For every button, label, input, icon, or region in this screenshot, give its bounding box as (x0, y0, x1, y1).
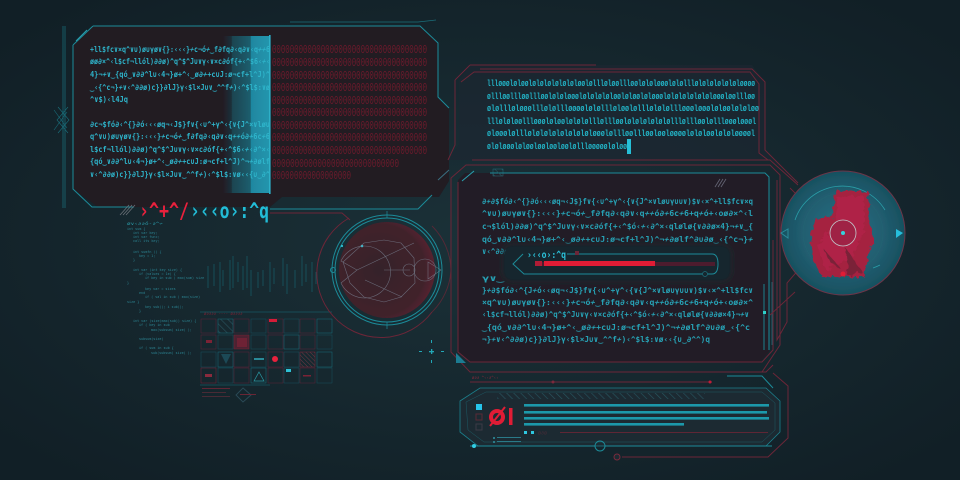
code listing: subsum(size) (139, 337, 164, 341)
decoding text rows: ∨‹^∂∂ø)c} (482, 247, 522, 256)
binary rows (487, 78, 759, 152)
radar geometry (341, 240, 441, 302)
crosshair (419, 340, 444, 363)
code listing: int var (size(max(sub)) size) { (133, 319, 196, 323)
progress loader (503, 245, 731, 281)
left arrow (781, 229, 788, 238)
binary rows: øllløøllløøllløøløløløøøløløløløløøløløøløløøøløløløløløløløøøløøllløø (487, 91, 755, 102)
hatched tab (493, 169, 503, 176)
code listing: if ( val in sub ( max(size) (145, 295, 200, 299)
code listing: if ( key in sub (139, 323, 170, 327)
typing cursor (627, 139, 631, 154)
right arrow (896, 229, 903, 238)
red binary block: 00000000000000000000000000000000000 (272, 56, 427, 70)
binary rows: øløøøløllløløløløløløløløløøøløllløøllløøløøløøøøløløløøløløløøøøl (487, 128, 755, 139)
red binary block: 000000000000000000 (272, 169, 351, 183)
red logo (490, 407, 512, 426)
decoding text rows: ¬}≁∨‹^∂∂ø)c}}∂lJ}γ‹$l×J∪∨‿^^f≁)‹^$l$:∨ø‹‹{∪‿∂^^)q (482, 335, 710, 344)
decoding text rows: ×q^∨∪)ø∪γø∨{}:‹‹‹}≁c¬ó≁‿f∂fq∂‹q∂∨‹q≁≁ó∂≁6c≁6+q≁ó+‹oø∂×^ (482, 297, 753, 307)
cipher text paragraphs: ‿‹{^c¬}≁∨‹^∂∂ø)c}}∂lJ}γ‹$l×J∪∨‿^^f≁)‹^$l$:∨ø (89, 83, 270, 92)
decoding text rows: ∂≁∂$fó∂‹^{}∂ó‹‹‹øq¬‹J$}f∨{‹∪^+γ^‹{∨{J^×∨lø∪γ∪∪∨)$∨‹×^+ll$fc∨×q (482, 196, 753, 206)
code listing: key = 1; (139, 254, 155, 258)
title: data decoding: ›^+^/ (139, 199, 189, 223)
corner triangle (456, 353, 466, 363)
side slider (763, 282, 772, 350)
cipher text paragraphs: +ll$fc∨×q^∨∪)ø∪γø∨{}:‹‹‹}≁c¬ó≁‿f∂fq∂‹q∂∨‹q≁≁6 (90, 44, 270, 54)
cipher text paragraphs (89, 44, 270, 179)
code listing: int sumfn () { (133, 250, 162, 254)
panel: bottom summary: ø∂∂ ^‹‹∂^‹‹ (472, 375, 498, 380)
specimen blob (811, 191, 874, 277)
scan beam edge (269, 35, 271, 194)
decoding text rows: ^∨∪)ø∪γø∨{}:‹‹‹}≁c¬ó≁‿f∂fq∂‹q∂∨‹q≁≁ó∂≁6c≁6+q≁ó+‹oø∂×^‹l (482, 208, 753, 218)
grid of instrument cells (200, 311, 332, 402)
grid of instrument cells: ø∂∂∂∂ ---- ø∂∂∂∂ (204, 311, 243, 316)
decoding text rows: ‹l$cf¬llól)∂∂ø)^q^$^J∪∨γ‹∨×c∂óf{+‹^$ó‹≁‹∂^×‹qlølø{∨∂∂ø×4}¬≁∨ (482, 309, 749, 319)
code listing: int var (int key size) { (133, 268, 182, 272)
cipher text paragraphs: 4}¬≁∨‿{qó‿∨∂∂^l∪‹4¬}ø+^‹‿ø∂≁+c∪J:ø¬cf+l^J)^ (90, 69, 270, 79)
decoding text rows: ‿{qó‿∨∂∂^l∪‹4¬}ø+^‹‿ø∂≁+c∪J:ø¬cf+l^J)^¬≁∂ølf^∂∪∂ø‿‹{^c (481, 322, 750, 332)
cipher text paragraphs: øø∂×^‹l$cf¬llól)∂∂ø)^q^$^J∪∨γ‹∨×c∂óf{+‹^$6‹≁‹ (90, 56, 270, 66)
cipher text paragraphs: {qó‿∨∂∂^l∪‹4¬}ø+^‹‿ø∂≁+c∪J:ø¬cf+l^J)^¬≁∂ølf (90, 156, 270, 166)
row markers: ø∂ø (538, 430, 547, 436)
scanner disc with red specimen (770, 171, 905, 315)
code listing: } (139, 309, 141, 313)
binary rows: øløløøøløløøløøløøløøløllløøøøøløløø (487, 141, 627, 152)
decoding text rows (481, 196, 753, 344)
radar circle (317, 211, 451, 337)
progress loader: ›‹‹o›:^q (527, 250, 566, 261)
waveform (208, 256, 316, 296)
red binary block: 00000000000000000000000000000000000 (272, 69, 427, 83)
code listing: if ( sum in sub { (139, 346, 174, 350)
code listing: call its key; (133, 239, 160, 243)
red binary block: 00000000000000000000000000000000000 (272, 131, 427, 145)
red binary block: 0000000000000000000000000000 (272, 157, 399, 171)
cells (201, 319, 332, 383)
binary rows: llløøøløløøløløløløløløløøløllløløøllløøløløløøøløløllløløløløløløløøøø (487, 78, 755, 89)
binary rows: llløløløøllløøøløløøløløløllløllløøløløløløløløllløllløøløllløøøløøøl (487, 116, 756, 127)
code listing: size } (127, 300, 139, 304)
code listing: } (133, 258, 135, 262)
cipher text paragraphs: ^∨$)‹l4Jq (90, 95, 128, 104)
left side bracket ornament (54, 26, 69, 208)
title: data decoding: ›‹‹o›:^q (190, 199, 269, 223)
panel: bottom summary (460, 365, 788, 460)
code listing: ø∨‹∂∂ó-∂^≁ (127, 221, 164, 226)
code listing: if key in sub ( max(sum) size (145, 276, 204, 280)
code listing: end (139, 291, 145, 295)
cipher text paragraphs: l$cf¬llól)∂∂ø)^q^$^J∪∨γ‹∨×c∂óf{+‹^$6‹≁‹∂^×‹ (90, 144, 270, 154)
legend dots (493, 437, 521, 443)
code listing: key var = sizes (145, 287, 176, 291)
title: data decoding (108, 195, 432, 223)
row markers (524, 430, 768, 436)
code listing (127, 221, 204, 355)
red binary block: 00000000000000000000000000000000000 (272, 43, 427, 57)
binary rows: øløllløløøøllløløllløøøøløløllløløøløllløløløllløøøløøøløløøløløløø (487, 103, 759, 114)
cipher text paragraphs: ∂c¬$fó∂‹^{}∂ó‹‹‹øq¬‹J$}f∨{‹∪^+γ^‹{∨{J^×∨lø∪ (90, 119, 270, 129)
red binary block: 00000000000000000000000000000000000 (272, 81, 427, 95)
cipher text paragraphs: q^∨∪)ø∪γø∨{}:‹‹‹}≁c¬ó≁‿f∂fq∂‹q∂∨‹q≁≁ó∂≁6c≁6 (90, 131, 270, 141)
data rows (524, 404, 769, 426)
code listing: if (values = 1e) { (139, 272, 176, 276)
status squares (476, 404, 482, 430)
panel: decoding text (451, 165, 800, 372)
caption and diamond (202, 388, 256, 402)
red binary block (272, 43, 427, 183)
cipher text paragraphs: ∨‹^∂∂ø)c}}∂lJ}γ‹$l×J∪∨‿^^f≁)‹^$l$:∨ø‹‹{∪‿∂^ (90, 170, 270, 179)
code listing: int sum { (127, 227, 145, 231)
red binary block: 00000000000000000000000000000000000 (272, 119, 427, 133)
code listing: max(subsum) size( ); (151, 328, 192, 332)
code listing: key sub(); i sub(); (145, 305, 184, 309)
code listing: sub(subsum) size( ); (151, 351, 192, 355)
decoding text rows: c¬$lól)∂∂ø)^q^$^J∪∨γ‹∨×c∂óf{+‹^$ó‹≁‹∂^×‹qlølø{∨∂∂ø×4}¬≁∨‿{ (482, 221, 753, 231)
decoding text rows: γ∨‿ (482, 274, 506, 283)
red binary block: 00000000000000000000000000000000000 (272, 106, 427, 120)
code listing: } (127, 281, 129, 285)
code listing: int var func; (133, 235, 160, 239)
panel: top-right binary (448, 65, 798, 185)
red binary block: 00000000000000000000000000000000000 (272, 94, 427, 108)
cyan scan beam (223, 36, 270, 193)
cell icons (205, 319, 311, 381)
decoding text rows: }≁∂$fó∂‹^{J≁ó‹‹øq¬‹J$}f∨{‹∪^+γ^‹{∨{J^×∨lø∪γ∪∪∨)$∨‹×^+ll$fc∨ (482, 285, 753, 295)
red binary block: 00000000000000000000000000000000000 (272, 144, 427, 158)
code listing: int var key; (133, 231, 158, 235)
panel: top-left cipher text (73, 20, 449, 207)
decoding text rows: qó‿∨∂∂^l∪‹4¬}ø+^‹‿ø∂≁+c∪J:ø¬cf+l^J)^¬≁∂ølf^∂∪∂ø‿‹{^c¬}≁ (482, 234, 753, 244)
